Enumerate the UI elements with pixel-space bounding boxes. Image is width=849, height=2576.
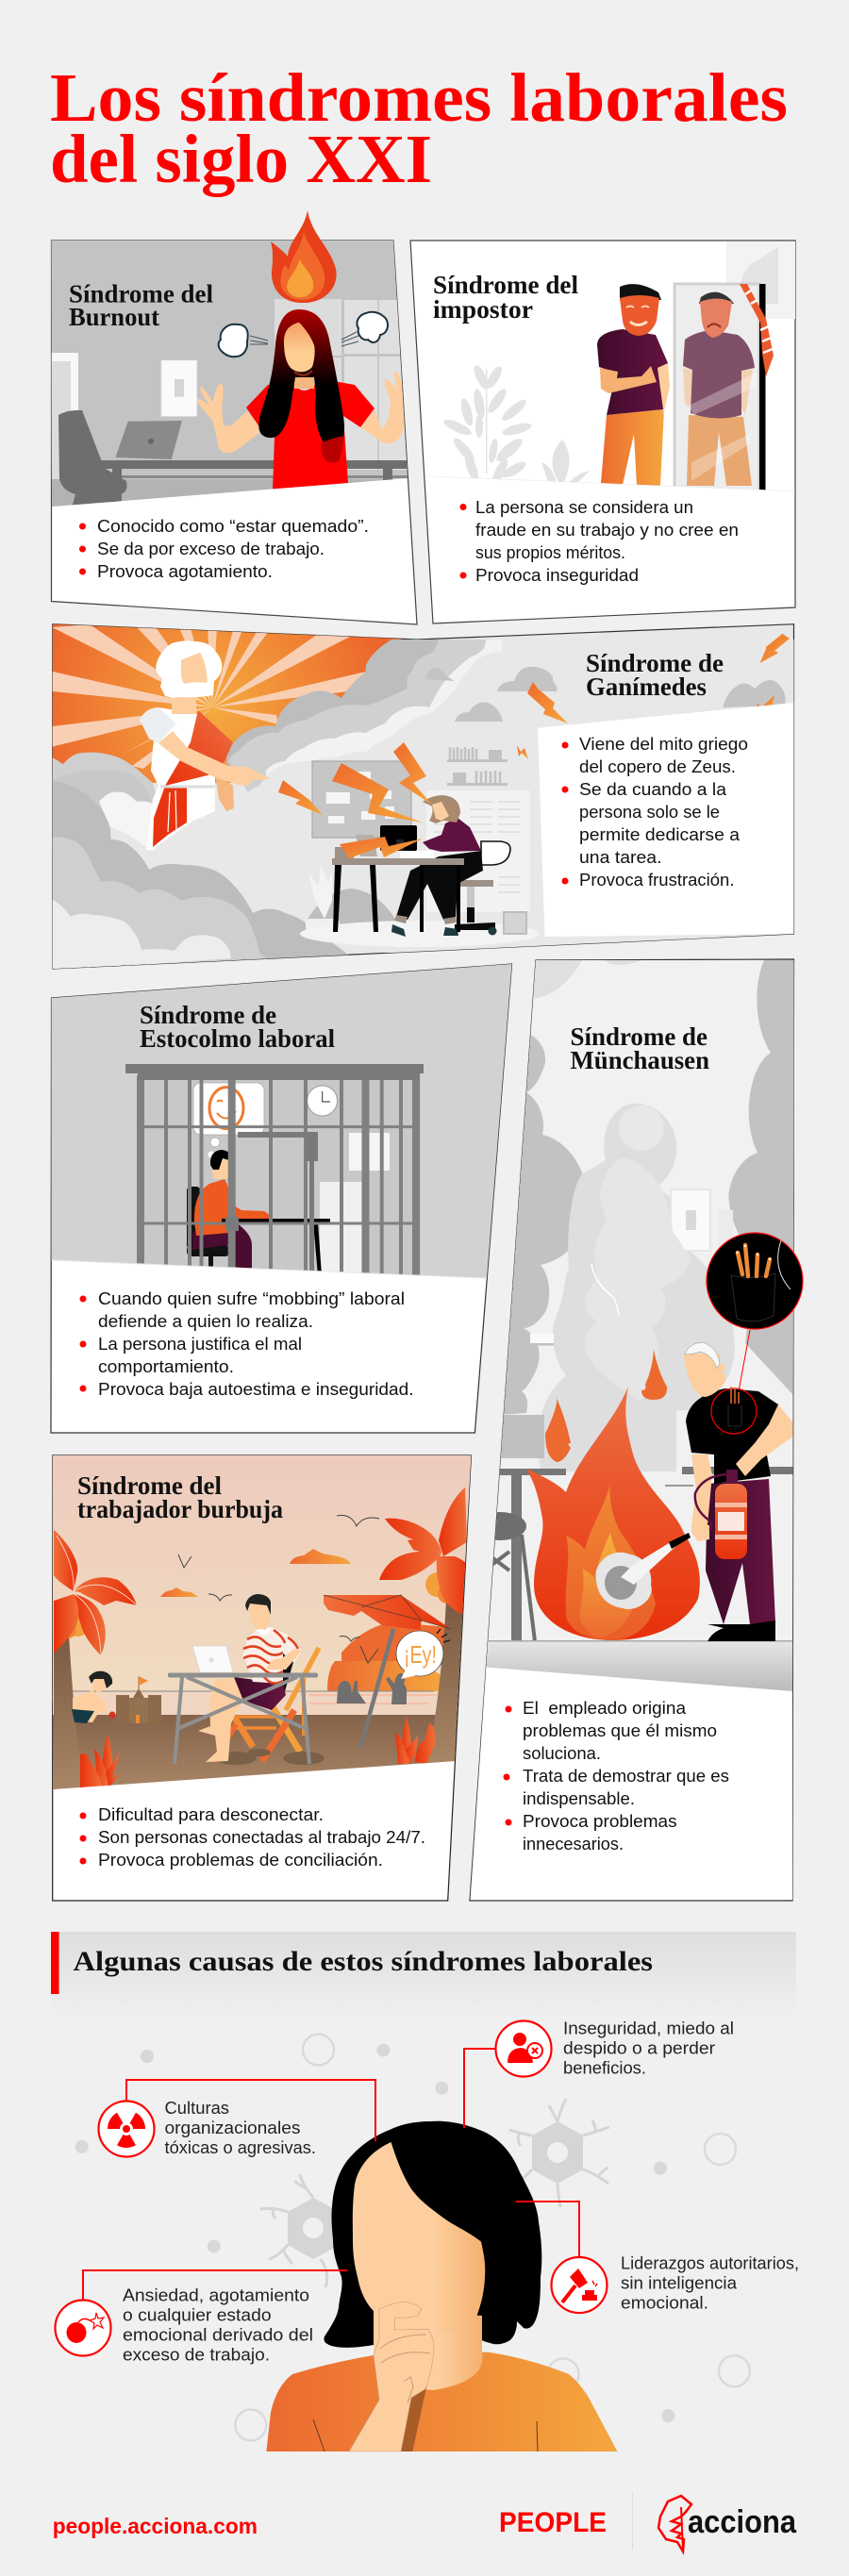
title: Los síndromes laborales (50, 59, 788, 136)
Zeus (140, 640, 271, 851)
white text area (470, 1668, 792, 1900)
title: del siglo XXI (50, 121, 432, 197)
heading (586, 649, 724, 701)
icon: flame on head (271, 210, 337, 303)
text block (79, 1805, 425, 1870)
text block: comportamiento. (98, 1357, 234, 1376)
illustration: man and mirror (426, 241, 795, 496)
text block: Conocido como “estar quemado”. (97, 517, 369, 536)
text block: La persona justifica el mal (98, 1335, 302, 1354)
text block (562, 735, 748, 889)
heading (69, 280, 213, 331)
cause: liderazgos (551, 2254, 799, 2313)
lighter smoke (658, 1185, 685, 1250)
logo: PEOPLE: PEOPLE (499, 2507, 607, 2538)
sun and island (327, 1622, 448, 1691)
panel: burnout (51, 210, 417, 624)
worker on laptop (192, 1594, 325, 1765)
panel: impostor (410, 241, 795, 623)
footer URL: people.acciona.com (53, 2514, 258, 2538)
heading: Burnout (69, 303, 159, 331)
text block: defiende a quien lo realiza. (98, 1312, 313, 1331)
text: Inseguridad, miedo al (563, 2019, 734, 2037)
text: emocional. (621, 2294, 708, 2313)
plant (441, 363, 590, 487)
speech bubble (396, 1629, 450, 1679)
text box (538, 703, 794, 937)
small pocket circle (711, 1388, 757, 1434)
text: tóxicas o agresivas. (164, 2138, 316, 2157)
heading: Síndrome del (433, 271, 578, 299)
text: organizacionales (164, 2119, 300, 2137)
heading: Síndrome de (140, 1001, 276, 1029)
birds (178, 1515, 379, 1663)
heading: Síndrome del (69, 280, 213, 308)
text block: Provoca baja autoestima e inseguridad. (98, 1380, 413, 1399)
floor (486, 1641, 792, 1691)
child and sand castle (72, 1671, 161, 1723)
text block: Dificultad para desconectar. (98, 1805, 324, 1824)
heading: Münchausen (570, 1046, 709, 1074)
icon: neuron right (509, 2099, 609, 2207)
logo: acciona (658, 2496, 797, 2551)
person (187, 1150, 269, 1275)
text block: fraude en su trabajo y no cree en (475, 521, 739, 540)
text block: El empleado origina (523, 1699, 687, 1718)
text block: persona solo se le (579, 803, 720, 822)
thought bubble (193, 1083, 264, 1158)
text block: Trata de demostrar que es (523, 1767, 729, 1786)
text (621, 2254, 799, 2313)
front clouds (153, 807, 234, 854)
panel: trabajador burbuja (52, 1455, 472, 1901)
panel: Münchausen (470, 957, 803, 1901)
heading: Síndrome de (570, 1022, 708, 1051)
text block (504, 1699, 729, 1853)
text block: Provoca problemas de conciliación. (98, 1851, 383, 1870)
text block: permite dedicarse a (579, 825, 741, 844)
text (563, 2019, 734, 2077)
text (164, 2099, 316, 2157)
text: Liderazgos autoritarios, (621, 2254, 799, 2273)
illustration: angry woman in office (51, 241, 409, 517)
text (123, 2286, 313, 2364)
illustration: Zeus and office worker (52, 623, 811, 976)
left palm (54, 1530, 137, 1789)
text block: del copero de Zeus. (579, 757, 736, 776)
table (168, 1673, 318, 1764)
icon: steam puff left (219, 324, 248, 357)
extinguisher spray smoke (596, 1533, 691, 1609)
silhouettes (337, 1673, 407, 1704)
text block: Viene del mito griego (579, 735, 748, 754)
heading (77, 1471, 283, 1523)
clouds (160, 1549, 351, 1597)
icon: bomb (55, 2300, 111, 2356)
text: despido o a perder (563, 2039, 715, 2058)
plants (80, 1717, 435, 1789)
cause: culturas (98, 2099, 316, 2157)
panel: Estocolmo (51, 962, 513, 1433)
panel: Ganímedes (52, 623, 811, 976)
text block: Son personas conectadas al trabajo 24/7. (98, 1828, 425, 1847)
text: sin inteligencia (621, 2273, 738, 2292)
text: Culturas (164, 2099, 229, 2118)
heading (140, 1001, 335, 1053)
icon: person with cross (496, 2020, 551, 2077)
cause: inseguridad (496, 2019, 734, 2077)
figure: mirror reflection (674, 284, 766, 496)
text block: problemas que él mismo (523, 1721, 717, 1740)
lightning bolts (278, 634, 790, 858)
text block: indispensable. (523, 1789, 635, 1808)
worker (332, 795, 510, 937)
man (684, 1342, 794, 1641)
text block: Se da por exceso de trabajo. (97, 540, 325, 558)
figure: man with mask (597, 284, 670, 486)
text block: sus propios méritos. (475, 543, 625, 562)
section: causes heading: Algunas causas de estos síndromes laborales (74, 1946, 653, 1977)
furniture (498, 1415, 544, 1458)
hand (349, 2302, 434, 2451)
wall picture (671, 1189, 710, 1251)
text block: soluciona. (523, 1744, 601, 1763)
icon: neuron left (260, 2174, 340, 2287)
illustration: beach worker (52, 1455, 472, 1795)
heading (433, 271, 578, 324)
text: emocional derivado del (123, 2326, 313, 2345)
clock (308, 1086, 338, 1116)
speech bubble: ¡Ey! (404, 1640, 437, 1669)
icon: fire extinguisher (715, 1484, 747, 1559)
figure: thinking person (266, 2121, 617, 2451)
text block: innecesarios. (523, 1835, 624, 1853)
heading: Síndrome del (77, 1471, 222, 1500)
office (300, 747, 540, 947)
tie curtain (740, 284, 774, 376)
background decor: cells and dots (75, 2034, 750, 2441)
text: beneficios. (563, 2058, 646, 2077)
small clouds (425, 667, 786, 722)
section: causes heading (51, 1932, 796, 2019)
smoke walls (530, 960, 582, 999)
text block (79, 1289, 413, 1399)
text block: Provoca frustración. (579, 871, 734, 889)
text block: Provoca agotamiento. (97, 562, 273, 581)
logo: acciona: acciona (688, 2504, 797, 2540)
illustration: man extinguishing his own fire (472, 957, 797, 1694)
cause: ansiedad (55, 2286, 313, 2364)
icon: radiation hazard (98, 2102, 155, 2156)
heading: impostor (433, 295, 533, 324)
text: Ansiedad, agotamiento (123, 2286, 309, 2305)
heading: Estocolmo laboral (140, 1024, 335, 1053)
illustration: office jail (51, 962, 513, 1283)
text block: Provoca inseguridad (475, 566, 639, 585)
right palm (379, 1487, 469, 1764)
callout: zoomed shirt pocket with matches (707, 1233, 803, 1329)
title (50, 59, 788, 197)
upper cloud layers (226, 640, 439, 766)
fire (526, 1350, 700, 1640)
text: o cualquier estado (123, 2305, 272, 2324)
connector lines (83, 2049, 579, 2301)
text block: Cuando quien sufre “mobbing” laboral (98, 1289, 405, 1308)
heading: Ganímedes (586, 673, 707, 701)
icon: steam puff right (357, 312, 388, 342)
heading: trabajador burbuja (77, 1495, 283, 1523)
icon: gavel (551, 2257, 608, 2313)
text: exceso de trabajo. (123, 2345, 270, 2364)
text block: Se da cuando a la (579, 780, 727, 799)
text block (460, 498, 739, 585)
text block: Provoca problemas (523, 1812, 677, 1831)
text block: una tarea. (579, 848, 662, 867)
sunburst (52, 623, 401, 783)
text block: La persona se considera un (475, 498, 693, 517)
heading: Síndrome de (586, 649, 724, 677)
heading (570, 1022, 709, 1074)
cell bars (141, 1075, 417, 1283)
umbrella (324, 1595, 451, 1748)
left back clouds (52, 753, 160, 830)
text block (79, 517, 369, 581)
